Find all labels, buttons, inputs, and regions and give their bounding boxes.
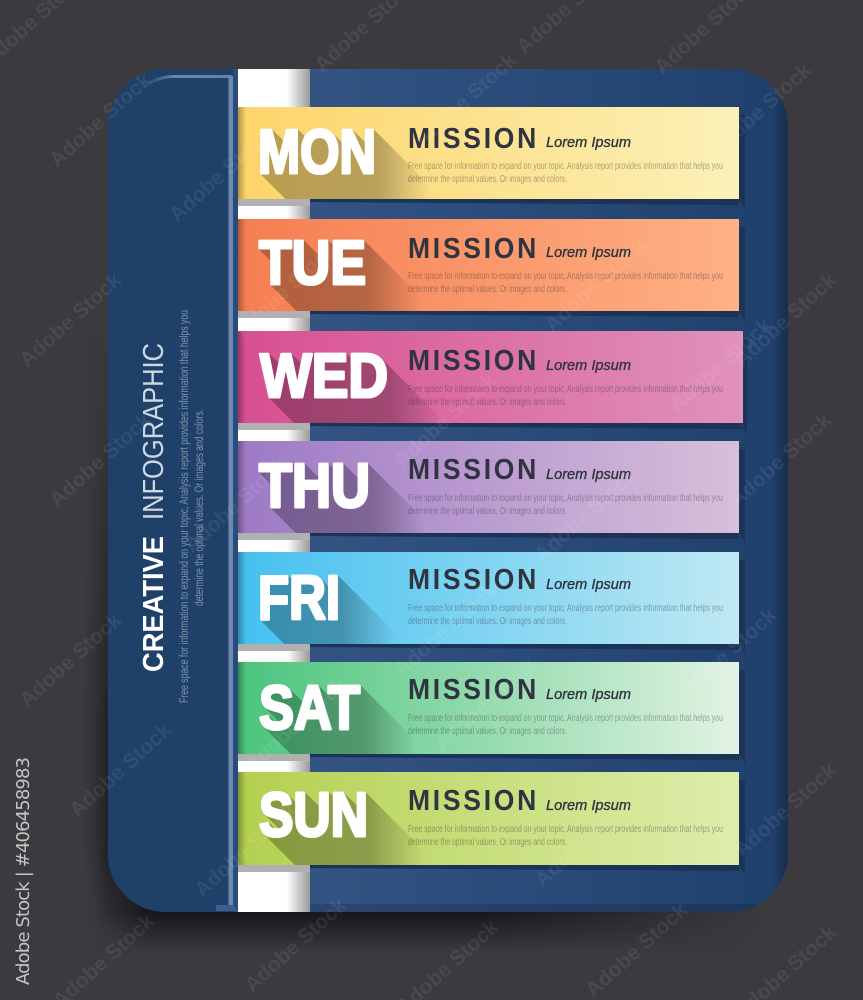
body text: determine the optimal values. Or images and colors. (408, 284, 567, 295)
body text: Free space for information to expand on your topic, Analysis report provides information that helps you (408, 603, 723, 614)
cover description: Free space for information to expand on your topic, Analysis report provides information that helps you (179, 310, 191, 703)
watermarks: Adobe Stock (670, 603, 781, 707)
heading: mission: MISSION (408, 674, 539, 706)
panel: Tuesday (238, 219, 745, 321)
watermarks: Adobe Stock (430, 653, 541, 757)
white page strip (238, 69, 310, 912)
body text: determine the optimal values. Or images and colors. (408, 506, 567, 517)
day: SUN with long shadow: SUN (259, 781, 368, 850)
watermarks: Adobe Stock (665, 313, 776, 417)
cover title: CREATIVE (138, 536, 170, 672)
panel: left cover (108, 69, 238, 912)
body text (408, 824, 723, 848)
day: THU with long shadow: THU (259, 452, 370, 521)
heading: mission: MISSION (408, 233, 539, 265)
body text: Free space for information to expand on your topic, Analysis report provides information that helps you (408, 493, 723, 504)
watermarks: Adobe Stock (530, 463, 641, 567)
grey strip shadows (238, 199, 310, 872)
body text: Free space for information to expand on your topic, Analysis report provides information that helps you (408, 161, 723, 172)
watermarks: Adobe Stock (730, 268, 841, 372)
panel: Wednesday (238, 331, 747, 433)
panel: Saturday (238, 662, 745, 764)
body text: Free space for information to expand on your topic, Analysis report provides information that helps you (408, 271, 723, 282)
watermarks: Adobe Stock (730, 758, 841, 862)
day: SAT with long shadow: SAT (259, 674, 360, 743)
watermarks: Adobe Stock (15, 268, 126, 372)
watermarks: Adobe Stock (705, 58, 816, 162)
body text (408, 271, 723, 295)
subheading: Lorem Ipsum (546, 797, 631, 814)
cover description: determine the optimal values. Or images and colors. (194, 409, 206, 606)
watermarks: Adobe Stock (65, 718, 176, 822)
subheading: Lorem Ipsum (546, 134, 631, 151)
subheading: Lorem Ipsum (546, 686, 631, 703)
watermarks: Adobe Stock (725, 408, 836, 512)
body text: Free space for information to expand on your topic, Analysis report provides information that helps you (408, 384, 723, 395)
body text: determine the optimal values. Or images and colors. (408, 397, 567, 408)
day: FRI with long shadow: FRI (258, 564, 340, 633)
body text: Free space for information to expand on your topic, Analysis report provides information that helps you (408, 713, 723, 724)
body text (408, 713, 723, 737)
subheading: Lorem Ipsum (546, 357, 631, 374)
panel: blue card (108, 69, 788, 912)
watermarks: Adobe Stock (45, 68, 156, 172)
panel: Thursday (238, 441, 745, 543)
day: WED with long shadow: WED (260, 342, 388, 411)
panel: Sunday (238, 772, 745, 875)
watermarks: Adobe Stock (390, 578, 501, 682)
body text: determine the optimal values. Or images and colors. (408, 837, 567, 848)
body text (408, 161, 723, 185)
watermarks: Adobe Stock (230, 238, 341, 342)
watermarks: Adobe Stock (540, 233, 651, 337)
body text (408, 603, 723, 627)
day: TUE with long shadow: TUE (259, 229, 366, 298)
subheading: Lorem Ipsum (546, 576, 631, 593)
watermarks: Adobe Stock (190, 798, 301, 902)
body text: Free space for information to expand on your topic, Analysis report provides information that helps you (408, 824, 723, 835)
stock id label: Adobe Stock | #406458983 (13, 757, 34, 985)
watermarks: Adobe Stock (180, 453, 291, 557)
watermarks: Adobe Stock (390, 368, 501, 472)
day: MON with long shadow: MON (258, 118, 376, 187)
watermarks: Adobe Stock (240, 673, 351, 777)
heading: mission: MISSION (408, 785, 539, 817)
body text: determine the optimal values. Or images and colors. (408, 616, 567, 627)
subheading: Lorem Ipsum (546, 244, 631, 261)
body text: determine the optimal values. Or images and colors. (408, 174, 567, 185)
watermarks: Adobe Stock (530, 788, 641, 892)
heading: mission: MISSION (408, 345, 539, 377)
subheading: Lorem Ipsum (546, 466, 631, 483)
panel: Friday (238, 552, 745, 654)
watermarks: Adobe Stock (240, 893, 351, 997)
body text: determine the optimal values. Or images and colors. (408, 726, 567, 737)
watermarks: Adobe Stock (410, 48, 521, 152)
body text (408, 493, 723, 517)
cover description (179, 310, 206, 703)
watermarks: Adobe Stock (15, 608, 126, 712)
watermarks: Adobe Stock (581, 898, 692, 1000)
card shadow: bottom (108, 880, 702, 944)
card shadow: left (92, 454, 116, 894)
watermarks: Adobe Stock (45, 408, 156, 512)
heading: mission: MISSION (408, 123, 539, 155)
cover title: INFOGRAPHIC (138, 343, 170, 520)
body text (408, 384, 723, 408)
watermarks: Adobe Stock (165, 123, 276, 227)
panel: Monday (238, 107, 745, 209)
cover title (138, 343, 170, 672)
heading: mission: MISSION (408, 454, 539, 486)
heading: mission: MISSION (408, 564, 539, 596)
